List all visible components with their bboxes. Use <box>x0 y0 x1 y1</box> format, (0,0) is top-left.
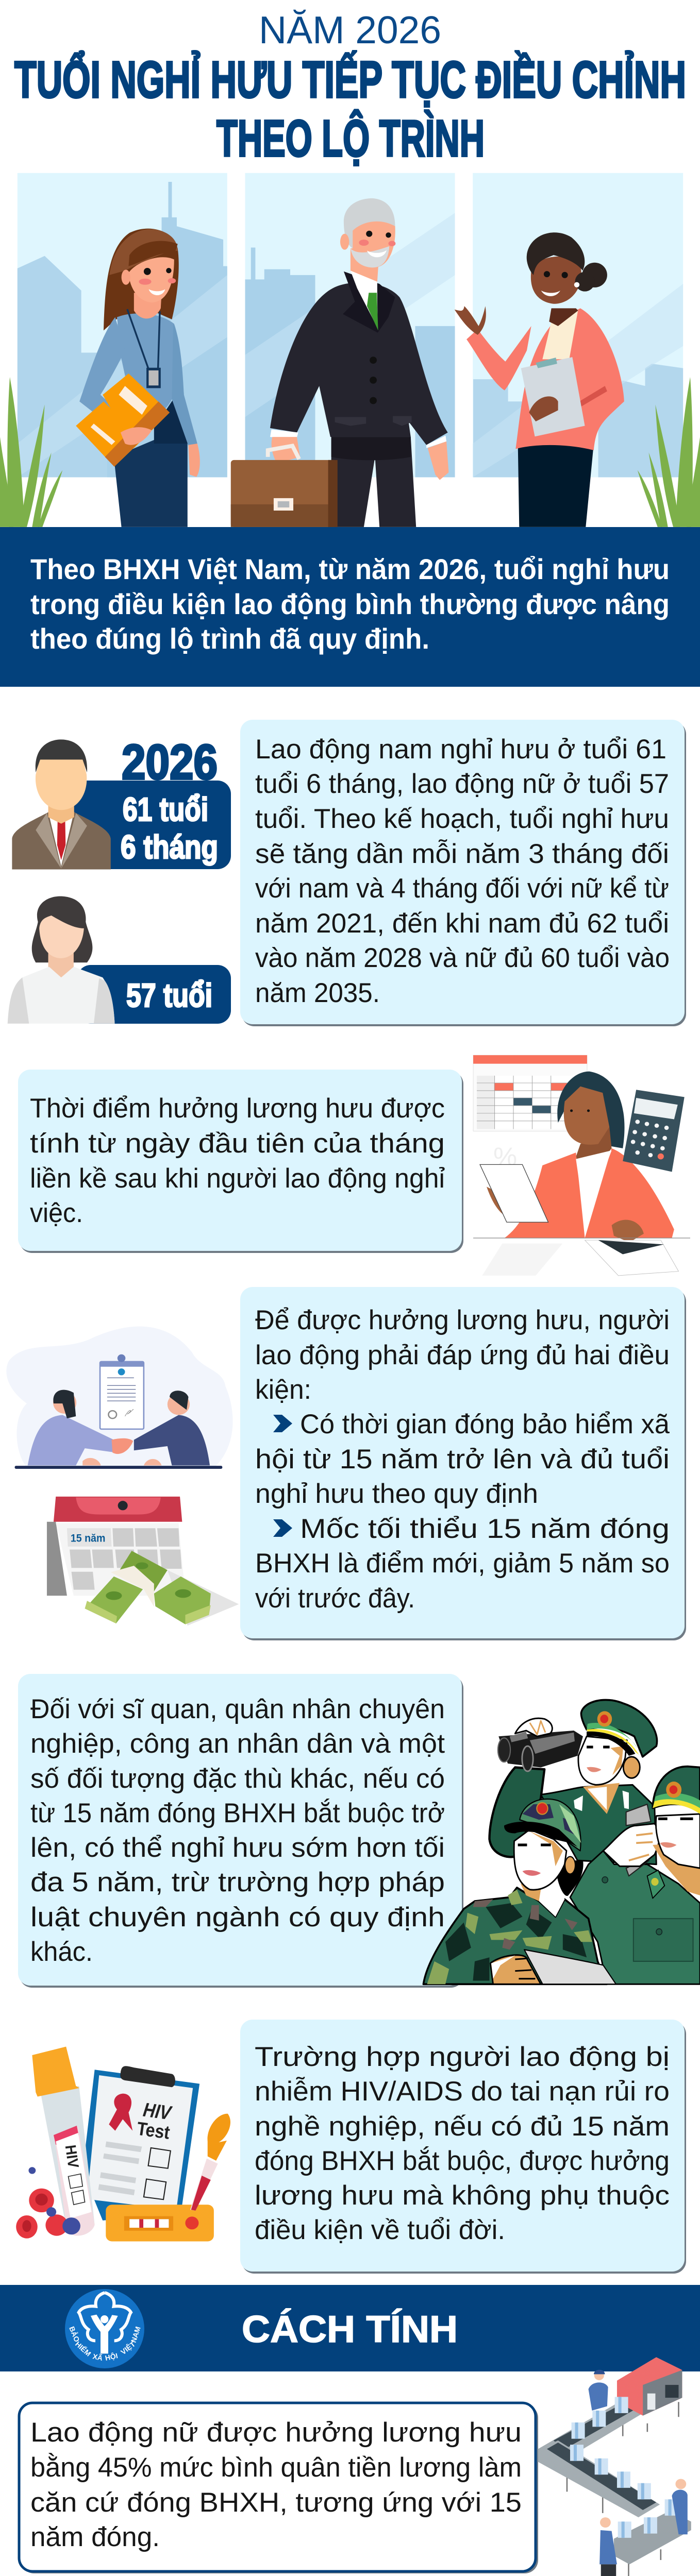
icon: BHXH logo <box>65 2289 144 2368</box>
icon: BHXH logo: HIỂM <box>74 2340 93 2358</box>
text: eligibility conditions: Để được hưởng lương hưu, người <box>255 1305 670 1335</box>
left plant <box>0 377 62 527</box>
text: women pension rate: năm đóng. <box>30 2522 160 2552</box>
age labels: man and woman in 2026 <box>8 735 231 1024</box>
text: pension start date: tính từ ngày đầu tiên của tháng <box>30 1128 445 1159</box>
illustration: production conveyor line <box>538 2357 691 2576</box>
illustration: HIV test kit: HIV <box>142 2099 174 2124</box>
text: retirement age: tuổi 6 tháng, lao động nữ ở tuổi 57 <box>255 769 669 799</box>
hero illustration: three colleagues in front of office windows <box>0 173 700 527</box>
text: retirement age: năm 2021, đến khi nam đủ 62 tuổi <box>255 908 669 939</box>
text: retirement age: tuổi. Theo kế hoạch, tuổi nghỉ hưu <box>255 804 669 834</box>
office windows with city skyline <box>18 173 683 477</box>
text: armed forces: lên, có thể nghỉ hưu sớm hơn tối <box>30 1833 445 1863</box>
text: retirement age: sẽ tăng dần mỗi năm 3 tháng đối <box>255 839 669 869</box>
text: eligibility conditions: Có thời gian đóng bảo hiểm xã <box>300 1409 670 1439</box>
title: NĂM 2026 <box>259 8 441 52</box>
text: eligibility conditions <box>255 1305 670 1614</box>
icon: man in suit <box>12 739 111 869</box>
illustration: three soldiers <box>423 1700 700 1984</box>
panel: pension start date <box>18 1070 463 1253</box>
icon: chevron bullet <box>273 1519 292 1537</box>
intro text <box>30 553 670 655</box>
intro text: Theo BHXH Việt Nam, từ năm 2026, tuổi nghỉ hưu <box>30 553 670 585</box>
title: THEO LỘ TRÌNH <box>216 110 485 167</box>
text: women pension rate: bằng 45% mức bình quân tiền lương làm <box>30 2452 522 2483</box>
text: HIV/AIDS case: nhiễm HIV/AIDS do tai nạn rủi ro <box>255 2076 670 2107</box>
illustration: calendar 15 years and money: 15 năm <box>71 1532 105 1545</box>
text: HIV/AIDS case: nghề nghiệp, nếu có đủ 15 năm <box>255 2111 670 2142</box>
text: retirement age: vào năm 2028 và nữ đủ 60 tuổi vào <box>255 943 670 973</box>
text: HIV/AIDS case: Trường hợp người lao động bị <box>255 2042 670 2072</box>
text: armed forces: nghiệp, công an nhân dân và một <box>30 1728 445 1759</box>
text: women pension rate: căn cứ đóng BHXH, tương ứng với 15 <box>30 2487 522 2518</box>
right plant <box>638 377 700 527</box>
illustration: HIV test kit: HIV <box>61 2144 81 2170</box>
text: retirement age: với nam và 4 tháng đối với nữ kể từ <box>255 873 669 904</box>
text: armed forces: Đối với sĩ quan, quân nhân chuyên <box>30 1694 445 1724</box>
text: pension start date <box>30 1093 445 1228</box>
text: HIV/AIDS case: lương hưu mà không phụ thuộc <box>255 2180 670 2211</box>
icon: woman in white shirt <box>8 896 115 1024</box>
text: women pension rate: Lao động nữ được hưởng lương hưu <box>30 2417 522 2448</box>
man age tag <box>72 781 231 869</box>
older man in suit with briefcase <box>231 198 448 527</box>
illustration: accountant with calculator: % <box>493 1142 517 1171</box>
text: pension start date: Thời điểm hưởng lương hưu được <box>30 1093 445 1124</box>
text: eligibility conditions: Mốc tối thiểu 15 năm đóng <box>300 1514 670 1544</box>
man age label: 61 tuổi <box>123 791 208 828</box>
icon: BHXH logo: XÃ <box>92 2351 104 2362</box>
woman age tag <box>77 965 231 1024</box>
intro text: trong điều kiện lao động bình thường được nâng <box>30 588 670 620</box>
text: pension start date: liền kề sau khi người lao động nghỉ <box>30 1163 445 1194</box>
text: armed forces: số đối tượng đặc thù khác, nếu có <box>30 1764 445 1794</box>
man age label <box>121 791 218 866</box>
intro text: theo đúng lộ trình đã quy định. <box>30 622 429 655</box>
panel: armed forces <box>18 1674 463 1988</box>
text: armed forces: khác. <box>30 1937 93 1967</box>
text: HIV/AIDS case: đóng BHXH bắt buộc, được hưởng <box>255 2146 670 2176</box>
panel: eligibility conditions <box>240 1287 686 1640</box>
text: eligibility conditions: BHXH là điểm mới, giảm 5 năm so <box>255 1548 670 1579</box>
text: armed forces: luật chuyên ngành có quy định <box>30 1902 445 1933</box>
woman with clipboard <box>455 232 624 527</box>
text: eligibility conditions: với trước đây. <box>255 1583 415 1614</box>
icon: BHXH logo: VIỆT <box>119 2340 137 2356</box>
text: pension start date: việc. <box>30 1198 83 1228</box>
woman with folder <box>76 229 200 527</box>
panel: women pension rate <box>19 2403 538 2573</box>
text: HIV/AIDS case <box>255 2042 670 2245</box>
illustration: HIV test kit: Test <box>136 2117 171 2143</box>
text: women pension rate <box>30 2417 522 2552</box>
illustration: HIV test kit <box>16 2046 230 2242</box>
text: retirement age: năm 2035. <box>255 978 380 1008</box>
icon: chevron bullet <box>273 1415 292 1432</box>
panel: retirement age <box>240 720 686 1026</box>
intro banner <box>0 527 700 687</box>
title <box>14 8 686 167</box>
section banner: calculation <box>0 2285 700 2371</box>
illustration: contract and handshake <box>6 1327 233 1469</box>
text: eligibility conditions: lao động phải đáp ứng đủ hai điều <box>255 1340 670 1370</box>
illustration: accountant with calculator <box>473 1055 690 1276</box>
man age label: 6 tháng <box>121 828 218 866</box>
text: retirement age <box>255 734 670 1008</box>
illustration: calendar 15 years and money <box>47 1497 239 1625</box>
text: HIV/AIDS case: điều kiện về tuổi đời. <box>255 2215 505 2245</box>
icon: BHXH logo: HỘI <box>104 2351 119 2362</box>
text: eligibility conditions: hội từ 15 năm trở lên và đủ tuổi <box>255 1444 670 1475</box>
year 2026: 2026 <box>122 735 218 790</box>
icon: BHXH logo: NAM <box>129 2326 142 2344</box>
text: armed forces <box>30 1694 445 1967</box>
text: eligibility conditions: nghỉ hưu theo quy định <box>255 1479 538 1509</box>
text: eligibility conditions: kiện: <box>255 1375 311 1405</box>
text: retirement age: Lao động nam nghỉ hưu ở tuổi 61 <box>255 734 666 765</box>
text: armed forces: đa 5 năm, trừ trường hợp pháp <box>30 1867 445 1897</box>
section heading: CÁCH TÍNH <box>242 2309 458 2350</box>
text: armed forces: từ 15 năm đóng BHXH bắt buộc trở <box>30 1798 445 1828</box>
panel: HIV/AIDS case <box>240 2020 686 2274</box>
woman age label: 57 tuổi <box>126 977 212 1014</box>
icon: BHXH logo: BẢO <box>68 2325 81 2343</box>
